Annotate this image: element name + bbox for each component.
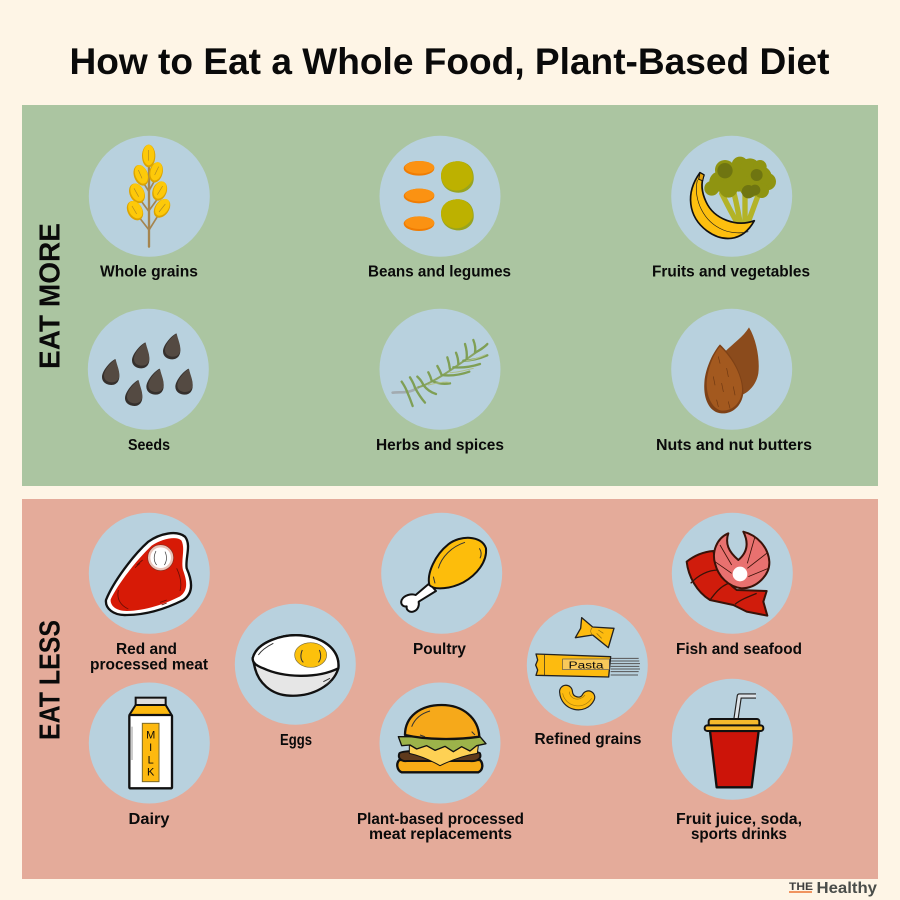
item: nuts and nut butters [656,309,812,454]
item: whole grains [89,136,210,280]
label: red and processed meat: Red and [116,641,177,658]
icon: egg in shell [253,635,338,696]
item: fish and seafood [672,513,802,658]
item: fruits and vegetables [652,136,810,280]
panel: eat less [22,499,878,879]
icon: wheat [123,145,174,247]
label: whole grains: Whole grains [100,264,198,280]
icon: milk carton [129,698,172,788]
icon: pasta [536,618,640,706]
label: fruit juice, soda, sports drinks [676,811,802,843]
icon: milk carton: K [147,767,155,779]
icon: pasta: Pasta [568,660,604,671]
icon: broccoli and banana [691,157,776,238]
label: poultry: Poultry [413,641,466,658]
icon: milk carton: I [149,742,152,754]
label: plant-based processed meat replacements: Plant-based processed [357,811,524,828]
item: fruit juice, soda, sports drinks [672,679,802,843]
label: fruit juice, soda, sports drinks: sports drinks [691,826,787,843]
icon: almonds [704,327,759,413]
label: fruit juice, soda, sports drinks: Fruit juice, soda, [676,811,802,828]
label: plant-based processed meat replacements [357,811,524,843]
label: nuts and nut butters: Nuts and nut butters [656,437,812,454]
item: eggs [235,604,356,749]
item: refined grains [527,605,648,748]
title: How to Eat a Whole Food, Plant-Based Diet [70,41,830,82]
label: refined grains: Refined grains [534,731,642,748]
logo: The Healthy: Healthy [816,880,877,897]
icon: burger [397,705,486,772]
item: dairy [89,682,210,828]
icon: drumstick [401,538,486,612]
label: herbs and spices: Herbs and spices [376,437,504,454]
label: seeds: Seeds [128,437,170,454]
heading: eat less: EAT LESS [34,620,66,740]
item: poultry [381,513,502,658]
icon: milk carton: L [148,755,154,767]
label: dairy: Dairy [128,811,170,828]
logo: The Healthy [789,880,877,897]
item: seeds [88,309,209,454]
icon: salmon steak [687,532,769,616]
item: plant-based processed meat replacements [357,682,524,843]
icon: milk carton: M [146,729,155,741]
label: fish and seafood: Fish and seafood [676,641,802,658]
panel: eat more [22,105,878,486]
heading: eat more: EAT MORE [34,223,66,369]
icon: seeds [102,333,193,406]
label: plant-based processed meat replacements: meat replacements [369,826,512,843]
label: beans and legumes: Beans and legumes [368,264,511,280]
item: red and processed meat [89,513,210,674]
label: red and processed meat [90,641,208,674]
label: eggs: Eggs [280,732,312,749]
item: herbs and spices [376,309,504,454]
icon: rosemary sprig [393,340,487,406]
label: fruits and vegetables: Fruits and vegetables [652,264,810,280]
logo: The Healthy: THE [789,881,813,893]
item: beans and legumes [368,136,511,280]
label: red and processed meat: processed meat [90,656,208,674]
icon: beans [404,161,474,231]
icon: soda cup [705,696,763,787]
icon: steak [106,533,191,615]
